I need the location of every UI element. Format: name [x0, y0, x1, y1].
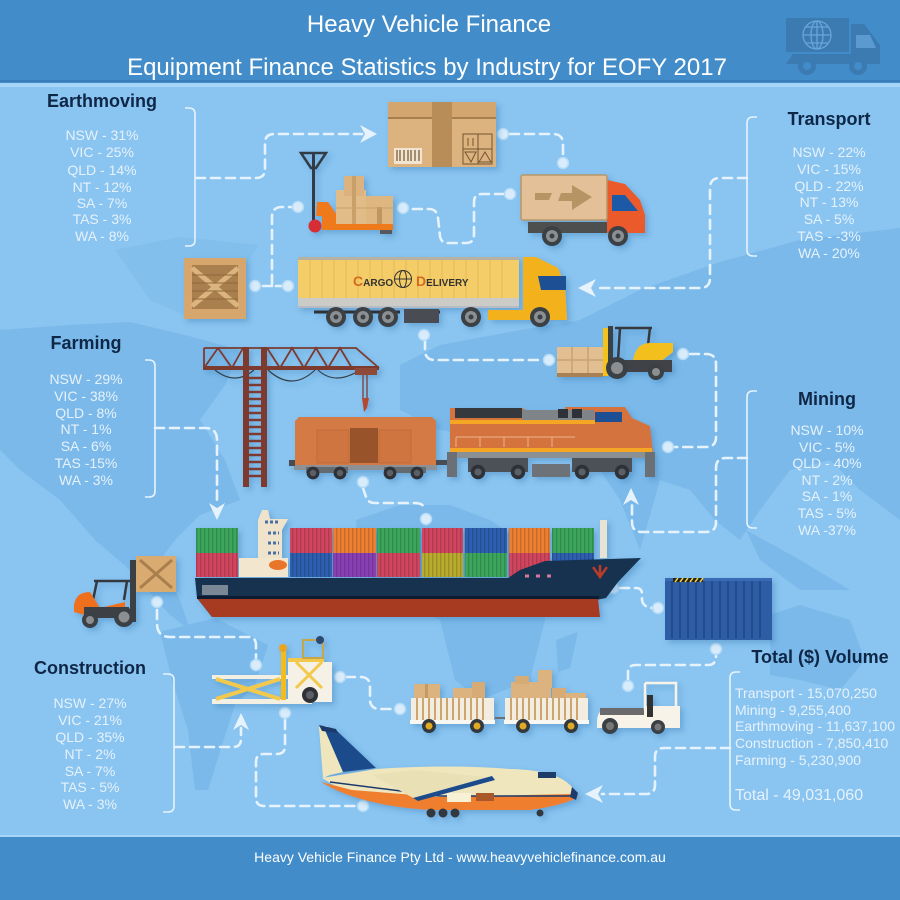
icon: delivery truck [521, 175, 645, 246]
list: Construction states: QLD - 35% [55, 729, 125, 745]
list: Transport states: SA - 5% [804, 211, 854, 227]
list: Earthmoving states: WA - 8% [75, 228, 129, 244]
icon: baggage carts [410, 670, 680, 734]
icon: scissor lift loader [212, 636, 332, 704]
list: Earthmoving states: NT - 12% [73, 179, 131, 195]
list: Farming states: VIC - 38% [54, 388, 118, 404]
list: Transport states: QLD - 22% [794, 178, 864, 194]
icon: wooden crate [184, 258, 246, 319]
icon: header truck [786, 18, 880, 75]
bracket: Farming [145, 360, 155, 497]
list: Farming states: SA - 6% [61, 438, 111, 454]
icon: cardboard box [388, 102, 496, 167]
footer text: Heavy Vehicle Finance Pty Ltd - www.heavyvehiclefinance.com.au [254, 849, 666, 865]
list: industry totals: Transport - 15,070,250 [735, 685, 877, 701]
icon: crane [203, 347, 379, 487]
list: Construction states: VIC - 21% [58, 712, 122, 728]
list: Transport states: NT - 13% [800, 194, 858, 210]
icon: freight wagon [289, 417, 448, 479]
list: industry totals [735, 685, 895, 768]
list: Earthmoving states: SA - 7% [77, 195, 127, 211]
list: Construction states: SA - 7% [65, 763, 115, 779]
grand total: Total - 49,031,060 [735, 787, 863, 804]
icon: forklift with pallet [557, 326, 673, 380]
list: Farming states: TAS -15% [55, 455, 117, 471]
cart 1 [410, 682, 495, 733]
panel: Mining [747, 389, 864, 538]
list: Transport states: NSW - 22% [792, 144, 866, 160]
list: Earthmoving states: TAS - 3% [73, 211, 131, 227]
list: Earthmoving states [65, 127, 139, 244]
list: Mining states [790, 422, 864, 538]
heading: Mining: Mining [798, 389, 856, 409]
icon: orange forklift with crate [74, 556, 176, 628]
panel: Total volume [730, 647, 895, 810]
list: Mining states: NT - 2% [801, 472, 853, 488]
icon: semi truck: CARGO [353, 273, 393, 289]
cart 2 [504, 670, 589, 733]
icon: container ship [195, 510, 641, 617]
list: Mining states: TAS - 5% [798, 505, 856, 521]
header band [0, 0, 900, 83]
icon: cargo plane [319, 725, 578, 818]
list: industry totals: Mining - 9,255,400 [735, 702, 851, 718]
tug tractor [597, 683, 680, 734]
dashed route lines [155, 134, 747, 806]
list: Transport states: VIC - 15% [797, 161, 861, 177]
panel: Transport [747, 109, 871, 261]
icon: pallet truck [301, 153, 393, 234]
list: Farming states: WA - 3% [59, 472, 113, 488]
list: Mining states: VIC - 5% [799, 439, 855, 455]
list: Mining states: SA - 1% [802, 488, 852, 504]
list: Construction states: TAS - 5% [61, 779, 119, 795]
ship hull [195, 558, 641, 617]
panel: Earthmoving [47, 91, 195, 246]
list: Transport states: WA - 20% [798, 245, 860, 261]
bracket: Mining [747, 391, 757, 528]
icon: locomotive [447, 407, 655, 479]
icon: blue shipping container [665, 578, 772, 640]
title line 1: Heavy Vehicle Finance [307, 11, 551, 38]
list: Transport states: TAS - -3% [797, 228, 861, 244]
panel: Farming [49, 333, 155, 497]
list: Mining states: WA -37% [798, 522, 856, 538]
heading: Earthmoving: Earthmoving [47, 91, 157, 111]
list: Construction states: NSW - 27% [53, 695, 127, 711]
bracket: Earthmoving [185, 108, 195, 246]
panel: Construction [34, 658, 174, 812]
icon: semi truck [298, 257, 567, 327]
list: Construction states: WA - 3% [63, 796, 117, 812]
list: Farming states: NSW - 29% [49, 371, 123, 387]
list: Earthmoving states: NSW - 31% [65, 127, 139, 143]
list: industry totals: Earthmoving - 11,637,100 [735, 718, 895, 734]
world map [0, 228, 900, 790]
list: Mining states: NSW - 10% [790, 422, 864, 438]
arrowheads [209, 125, 639, 803]
title line 2: Equipment Finance Statistics by Industry for EOFY 2017 [127, 54, 727, 81]
route dots [152, 128, 722, 812]
list: industry totals: Construction - 7,850,410 [735, 735, 889, 751]
list: industry totals: Farming - 5,230,900 [735, 752, 861, 768]
icon: semi truck: DELIVERY [416, 273, 469, 289]
bracket: Construction [163, 674, 174, 812]
ship containers [196, 528, 594, 577]
bracket: Total [730, 672, 740, 810]
list: Earthmoving states: VIC - 25% [70, 144, 134, 160]
heading: Farming: Farming [50, 333, 122, 353]
list: Construction states [53, 695, 127, 812]
heading: Transport: Transport [787, 109, 871, 129]
ship superstructure [239, 510, 607, 577]
heading: Construction: Construction [34, 658, 146, 678]
list: Farming states: QLD - 8% [55, 405, 117, 421]
footer band [0, 835, 900, 900]
list: Earthmoving states: QLD - 14% [67, 162, 137, 178]
list: Transport states [792, 144, 866, 261]
bracket: Transport [747, 117, 757, 256]
list: Farming states: NT - 1% [60, 421, 112, 437]
heading: Total ($) Volume: Total ($) Volume [751, 647, 889, 667]
list: Mining states: QLD - 40% [792, 455, 862, 471]
list: Construction states: NT - 2% [64, 746, 116, 762]
list: Farming states [49, 371, 123, 488]
